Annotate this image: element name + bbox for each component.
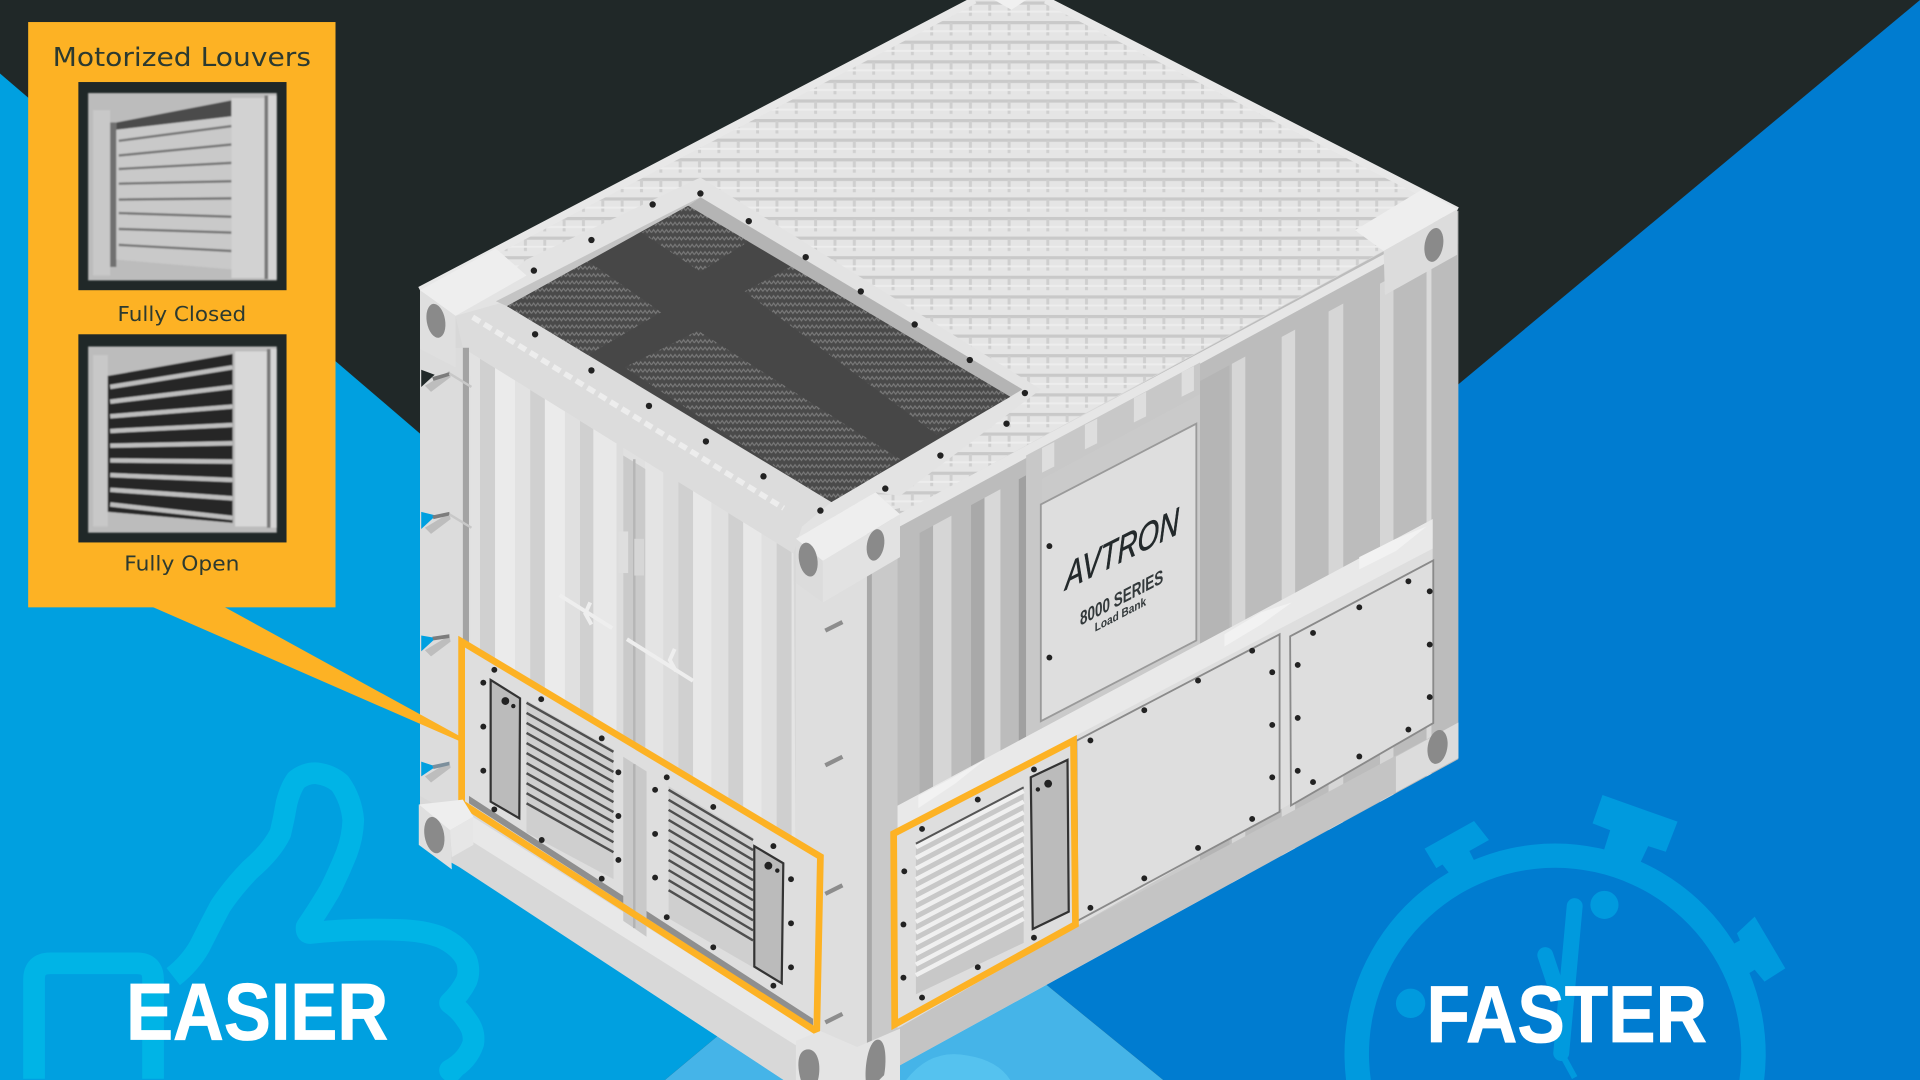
heading: faster: FASTER [1427, 970, 1707, 1060]
label: fully closed: Fully Closed [118, 302, 246, 326]
callout pointer [151, 606, 462, 742]
corner casting: top right [1355, 190, 1457, 295]
right face corrugations [891, 184, 1458, 1065]
door latch handles [560, 595, 693, 681]
left corner post [420, 348, 471, 820]
corner casting: bottom right [1425, 728, 1450, 766]
panel: motorized louvers [28, 22, 336, 607]
front corner post [796, 508, 900, 1080]
nameplate [1041, 424, 1196, 721]
right face louver highlighted [894, 740, 1075, 1024]
brand: AVTRON: AVTRON [1064, 499, 1180, 599]
light blue icon fragment [906, 1054, 1010, 1080]
lower right band and panels base [898, 519, 1458, 1065]
corner casting: bottom left [419, 800, 473, 869]
background light blue overlap [665, 874, 1163, 1080]
base beam [452, 817, 817, 1080]
model: Load Bank: Load Bank [1095, 594, 1147, 635]
vent frame and mesh [456, 178, 1041, 553]
icon: thumbs up outline [34, 773, 474, 1079]
middle access panel [1076, 634, 1280, 921]
photo frame: fully open [78, 334, 287, 542]
top face with tread plate [420, 0, 1457, 539]
model: 8000 SERIES: 8000 SERIES [1080, 565, 1163, 630]
photo frame: fully closed [78, 82, 287, 290]
right access panel [1290, 560, 1433, 805]
photo: fully closed louver [88, 93, 277, 280]
panel heading: Motorized Louvers [53, 43, 311, 73]
label: fully open: Fully Open [124, 552, 239, 576]
corner casting: bottom front [796, 1029, 900, 1080]
door seam column [618, 456, 645, 784]
window band above plate [1026, 362, 1200, 487]
left face corrugations [470, 353, 796, 838]
left face louver highlighted [462, 642, 820, 1032]
load bank container [419, 0, 1458, 1080]
corner casting: top front [796, 492, 900, 602]
icon: stopwatch [1344, 795, 1785, 1080]
heading: easier: EASIER [126, 968, 388, 1058]
corner casting: top left [420, 249, 527, 367]
background left blue band [0, 73, 911, 1080]
container silhouette [420, 0, 1457, 1080]
background right blue band [911, 0, 1920, 1080]
photo: fully open louver [88, 347, 277, 533]
